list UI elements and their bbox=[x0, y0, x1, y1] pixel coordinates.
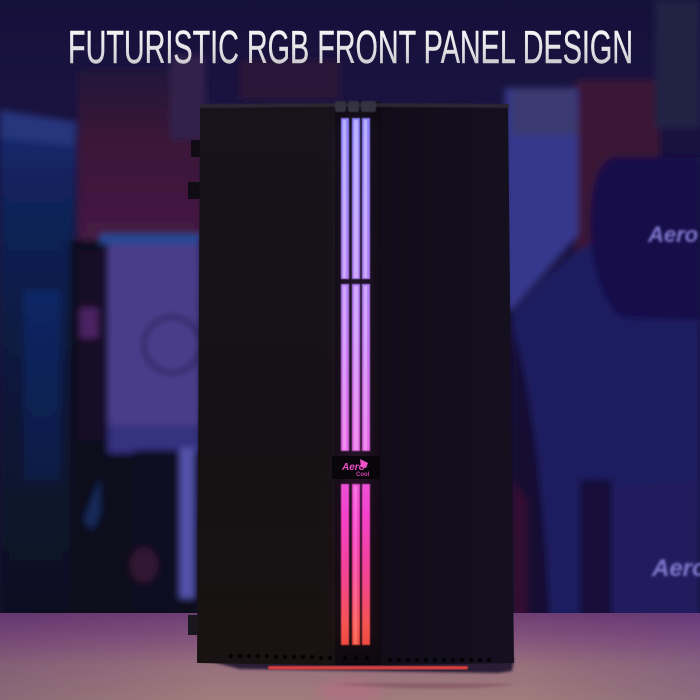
wooden table bbox=[0, 613, 700, 700]
blue cabinet, left bbox=[0, 110, 76, 620]
lower segment bbox=[341, 484, 370, 645]
top edge bbox=[200, 103, 509, 108]
right front panel bbox=[380, 104, 514, 665]
brick wall, right bbox=[575, 80, 660, 260]
framed poster bbox=[108, 236, 200, 450]
chair logo text bbox=[647, 222, 700, 582]
side buttons bbox=[191, 140, 200, 157]
middle segment bbox=[341, 284, 370, 451]
PC case bbox=[188, 101, 514, 665]
gaming chair bbox=[513, 240, 700, 620]
upper segment bbox=[341, 118, 370, 279]
bottom vent holes bbox=[229, 654, 491, 662]
center spine bbox=[335, 102, 381, 665]
bright centre of bars bbox=[343, 120, 367, 644]
lower shelf items bbox=[134, 450, 179, 615]
logo badge: Aero bbox=[341, 462, 365, 473]
brick wall, left bbox=[78, 70, 203, 240]
logo badge: Cool bbox=[356, 472, 370, 478]
RGB light glow bbox=[338, 118, 373, 645]
chair logo text: Aero bbox=[647, 222, 698, 247]
logo badge bbox=[332, 456, 380, 479]
RGB light bars bbox=[341, 118, 370, 645]
shelf and dark books bbox=[70, 240, 200, 620]
chair headrest bbox=[590, 157, 700, 320]
left front panel bbox=[197, 104, 336, 665]
white box behind case, right bbox=[505, 88, 578, 310]
case shadow and red underglow bbox=[197, 658, 514, 673]
